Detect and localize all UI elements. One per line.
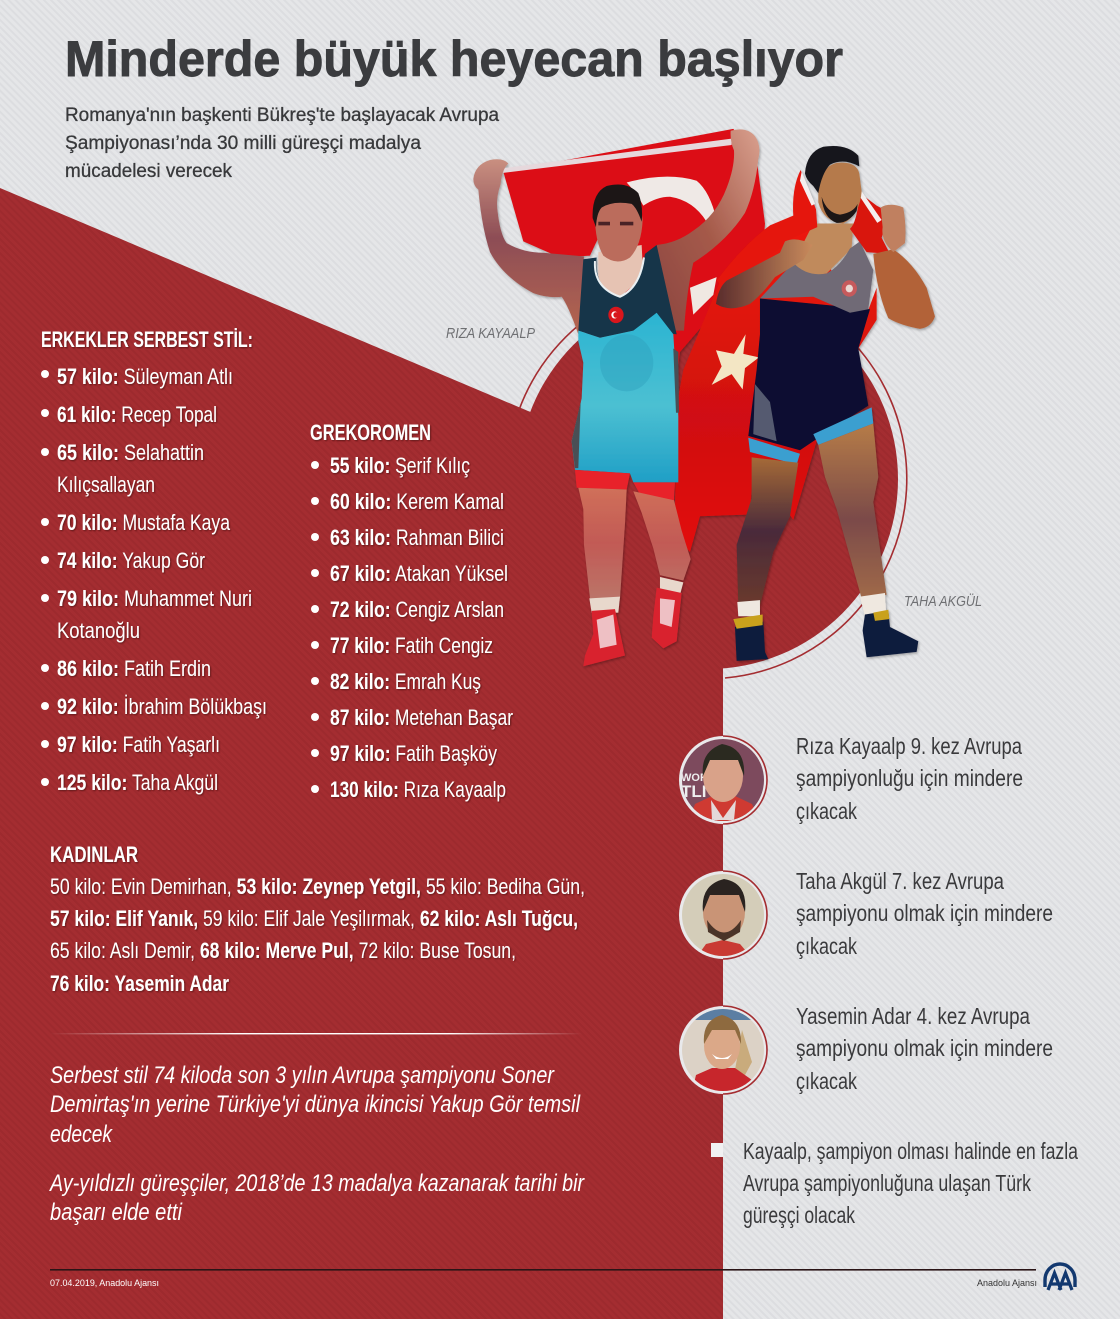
heading: men's freestyle: ERKEKLER SERBEST STİL: bbox=[41, 327, 253, 352]
Taha face bbox=[818, 163, 862, 224]
list: men's freestyle: 65 kilo: Selahattin bbox=[57, 440, 204, 465]
Taha scarf right bbox=[850, 193, 890, 254]
Riza left arm bbox=[473, 159, 584, 334]
text block: note on Yakup Gor bbox=[50, 1062, 581, 1148]
avatar: Riza Kayaalp: WOR bbox=[681, 772, 708, 784]
flag crescent bbox=[627, 177, 717, 222]
list: men's freestyle: 92 kilo: İbrahim Bölükbaşı bbox=[57, 694, 267, 719]
list: men's freestyle: Kılıçsallayan bbox=[57, 472, 155, 497]
outer ring arc bbox=[519, 279, 907, 678]
text block: note on Yakup Gor: Serbest stil 74 kiloda son 3 yılın Avrupa şampiyonu Soner bbox=[50, 1062, 555, 1089]
text block: 2018 medals note: başarı elde etti bbox=[50, 1199, 183, 1226]
Taha emblem bbox=[842, 280, 857, 297]
text block: women's list: 50 kilo: Evin Demirhan, 53 kilo: Zeynep Yetgil, 55 kilo: Bediha Gün, bbox=[50, 874, 585, 899]
avatar: Yasemin Adar bbox=[679, 1006, 767, 1094]
callout: Kayaalp record: Avrupa şampiyonluğuna ulaşan Türk bbox=[743, 1170, 1031, 1196]
heading: Greco-Roman: GREKOROMEN bbox=[310, 420, 431, 445]
Riza right arm bbox=[657, 129, 759, 331]
list: men's freestyle: 125 kilo: Taha Akgül bbox=[57, 770, 218, 795]
title: Minderde büyük heyecan başlıyor bbox=[65, 31, 843, 87]
footer agency name: Anadolu Ajansı bbox=[977, 1278, 1037, 1289]
Taha shoes bbox=[735, 611, 918, 661]
Riza emblem bbox=[608, 307, 624, 323]
list: men's freestyle: 79 kilo: Muhammet Nuri bbox=[57, 586, 252, 611]
Riza singlet top bbox=[578, 245, 677, 338]
marker: callout tab bbox=[711, 1143, 723, 1157]
list: Greco-Roman: 87 kilo: Metehan Başar bbox=[330, 705, 513, 730]
avatar: Taha Akgul bbox=[679, 871, 767, 959]
note: Taha Akgul bbox=[796, 868, 1053, 959]
list: Greco-Roman: 63 kilo: Rahman Bilici bbox=[330, 525, 504, 550]
note: Riza Kayaalp: şampiyonluğu için mindere bbox=[796, 765, 1023, 791]
caption: Taha Akgul: TAHA AKGÜL bbox=[904, 592, 982, 610]
Riza legs bbox=[578, 488, 691, 598]
avatar: Riza Kayaalp: TLI bbox=[681, 782, 706, 801]
Taha emblem center bbox=[846, 285, 853, 292]
Riza face bbox=[595, 193, 643, 262]
list: Greco-Roman bbox=[311, 453, 513, 802]
subtitle: mücadelesi verecek bbox=[65, 160, 232, 182]
list: Greco-Roman: 72 kilo: Cengiz Arslan bbox=[330, 597, 504, 622]
footer date and source: 07.04.2019, Anadolu Ajansı bbox=[50, 1278, 159, 1289]
list: Greco-Roman: 130 kilo: Rıza Kayaalp bbox=[330, 777, 506, 802]
text block: note on Yakup Gor: Demirtaş'ın yerine Türkiye'yi dünya ikincisi Yakup Gör temsil bbox=[50, 1091, 581, 1118]
flag behind Taha bbox=[675, 216, 877, 552]
flag white fragment bbox=[690, 277, 717, 315]
list: Greco-Roman: 55 kilo: Şerif Kılıç bbox=[330, 453, 470, 478]
Riza shoes bbox=[583, 588, 682, 666]
callout: Kayaalp record: güreşçi olacak bbox=[743, 1202, 855, 1228]
note: Riza Kayaalp: çıkacak bbox=[796, 798, 857, 824]
Riza singlet neckline bbox=[595, 257, 644, 297]
Riza singlet body bbox=[572, 313, 678, 482]
subtitle: Şampiyonası’nda 30 milli güreşçi madalya bbox=[65, 132, 421, 154]
note: Taha Akgul: şampiyonu olmak için mindere bbox=[796, 900, 1053, 926]
footer rule bbox=[50, 1269, 1036, 1271]
flag behind Riza bbox=[503, 129, 765, 406]
avatar: Riza Kayaalp bbox=[679, 736, 767, 824]
text block: women's list: 76 kilo: Yasemin Adar bbox=[50, 971, 229, 996]
note: Taha Akgul: Taha Akgül 7. kez Avrupa bbox=[796, 868, 1004, 894]
Taha singlet top bbox=[760, 241, 873, 313]
Taha beard bbox=[822, 197, 858, 223]
subtitle bbox=[65, 104, 499, 182]
list: men's freestyle: 61 kilo: Recep Topal bbox=[57, 402, 217, 427]
Taha scarf left bbox=[717, 170, 817, 288]
note: Yasemin Adar bbox=[796, 1003, 1053, 1094]
text block: women's list: 65 kilo: Aslı Demir, 68 kilo: Merve Pul, 72 kilo: Buse Tosun, bbox=[50, 938, 516, 963]
list: Greco-Roman: 67 kilo: Atakan Yüksel bbox=[330, 561, 508, 586]
Taha shoe trims bbox=[733, 610, 889, 629]
Taha hand bbox=[881, 205, 906, 252]
Taha right arm bbox=[873, 249, 935, 329]
note: Yasemin Adar: çıkacak bbox=[796, 1068, 857, 1094]
Taha singlet bbox=[748, 298, 870, 450]
note: Yasemin Adar: Yasemin Adar 4. kez Avrupa bbox=[796, 1003, 1030, 1029]
list: men's freestyle: 86 kilo: Fatih Erdin bbox=[57, 656, 211, 681]
note: Taha Akgul: çıkacak bbox=[796, 933, 857, 959]
note: Riza Kayaalp: Rıza Kayaalp 9. kez Avrupa bbox=[796, 733, 1022, 759]
list: Greco-Roman: 77 kilo: Fatih Cengiz bbox=[330, 633, 493, 658]
note: Riza Kayaalp bbox=[796, 733, 1023, 824]
Riza belly emblem bbox=[600, 334, 653, 391]
Riza shoe laces bbox=[597, 598, 675, 648]
note: Yasemin Adar: şampiyonu olmak için mindere bbox=[796, 1035, 1053, 1061]
list: men's freestyle: 70 kilo: Mustafa Kaya bbox=[57, 510, 231, 535]
text block: 2018 medals note bbox=[48, 1170, 585, 1226]
Taha right leg bbox=[818, 423, 887, 598]
Taha bands bbox=[748, 407, 873, 465]
Riza bands bbox=[575, 470, 675, 500]
list: Greco-Roman: 97 kilo: Fatih Başköy bbox=[330, 741, 497, 766]
Riza crescent cut bbox=[613, 312, 619, 318]
red background panel bbox=[0, 188, 898, 1319]
Riza socks bbox=[589, 577, 683, 613]
Taha hair bbox=[805, 146, 859, 193]
caption: Riza Kayaalp: RIZA KAYAALP bbox=[446, 326, 535, 342]
text block: women's list: 57 kilo: Elif Yanık, 59 kilo: Elif Jale Yeşilırmak, 62 kilo: Aslı Tuğcu, bbox=[50, 906, 578, 931]
list: men's freestyle: 74 kilo: Yakup Gör bbox=[57, 548, 205, 573]
Taha scarf right stripe bbox=[860, 191, 882, 223]
Taha side pattern bbox=[753, 384, 777, 441]
list: Greco-Roman: 60 kilo: Kerem Kamal bbox=[330, 489, 504, 514]
Riza side pattern bbox=[572, 348, 679, 468]
text block: note on Yakup Gor: edecek bbox=[50, 1121, 114, 1148]
list: men's freestyle: 57 kilo: Süleyman Atlı bbox=[57, 364, 233, 389]
Taha left leg bbox=[737, 457, 798, 606]
text block: 2018 medals note: Ay-yıldızlı güreşçiler, 2018’de 13 madalya kazanarak tarihi bir bbox=[48, 1170, 585, 1197]
list: Greco-Roman: 82 kilo: Emrah Kuş bbox=[330, 669, 481, 694]
flag star bbox=[712, 334, 759, 390]
list: men's freestyle: Kotanoğlu bbox=[57, 618, 140, 643]
Riza chest bbox=[598, 245, 643, 297]
list: men's freestyle bbox=[41, 364, 267, 795]
Taha left arm bbox=[716, 239, 813, 308]
Riza crescent bbox=[611, 311, 618, 318]
Taha chest bbox=[793, 224, 853, 277]
text block: women's list bbox=[50, 874, 585, 996]
wrestlers illustration bbox=[473, 129, 935, 666]
Riza hair bbox=[593, 184, 642, 227]
heading: women: KADINLAR bbox=[50, 842, 138, 867]
Taha scarf stripe bbox=[800, 172, 815, 206]
subtitle: Romanya'nın başkenti Bükreş'te başlayacak Avrupa bbox=[65, 104, 499, 126]
Riza eyes bbox=[598, 222, 633, 225]
logo: Anadolu Agency bbox=[1045, 1264, 1075, 1290]
list: men's freestyle: 97 kilo: Fatih Yaşarlı bbox=[57, 732, 220, 757]
callout: Kayaalp record bbox=[743, 1138, 1078, 1228]
flag hem bbox=[503, 139, 732, 173]
Taha socks bbox=[737, 593, 886, 616]
